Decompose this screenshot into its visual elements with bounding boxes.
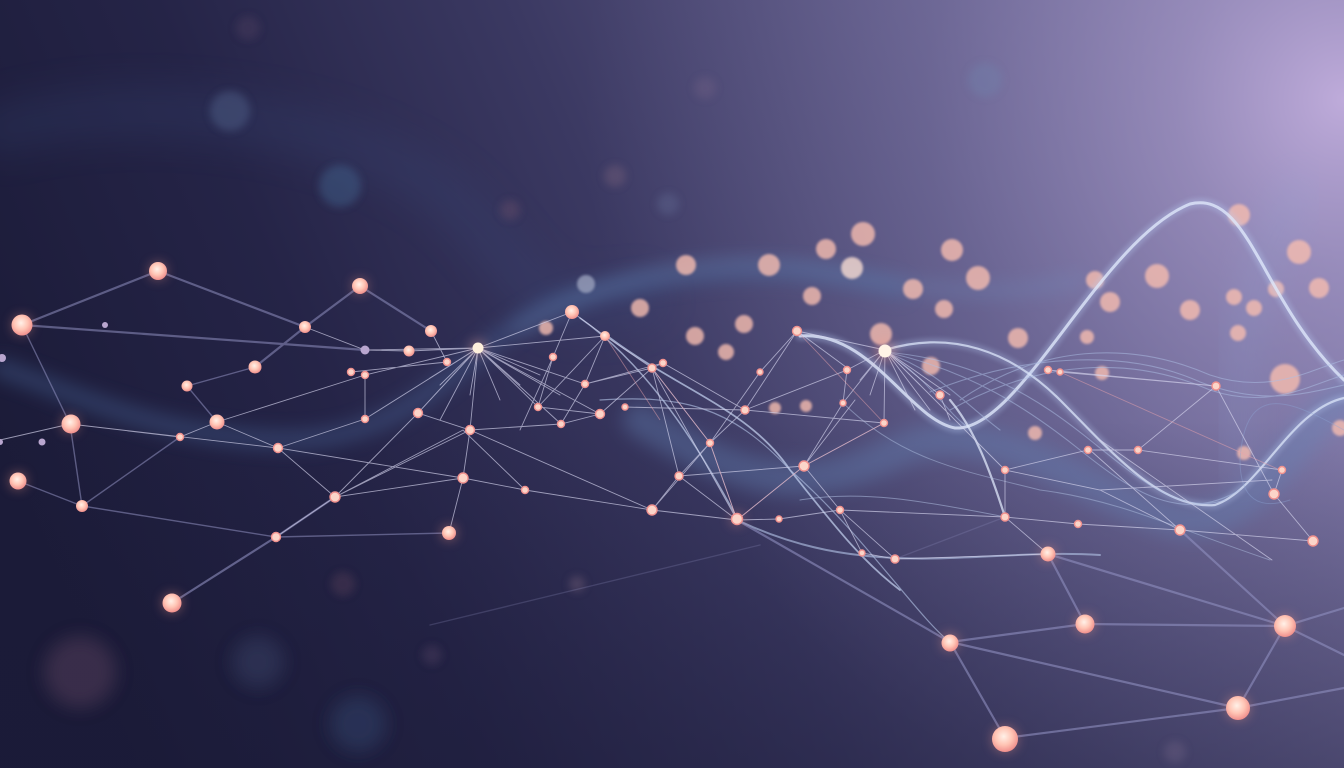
peach out-of-focus nodes [539, 204, 1344, 460]
muted lilac nodes [0, 322, 370, 446]
network edges: fine mesh [0, 312, 1313, 560]
large foreground nodes [10, 262, 1296, 752]
node glows [10, 263, 1295, 751]
bright light ribbon [580, 203, 1344, 642]
small mesh nodes [176, 326, 1318, 563]
blurred ribbon waves [0, 112, 1344, 521]
pink accent edges [605, 331, 1280, 520]
network edges: thick foreground [18, 271, 1344, 738]
fibres [885, 352, 1344, 504]
